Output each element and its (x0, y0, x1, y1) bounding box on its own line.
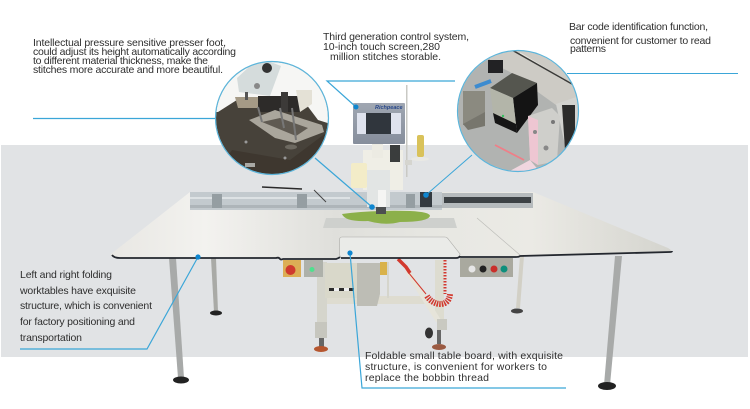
leader line: control system (327, 81, 455, 110)
text: control system: million stitches storable. (330, 51, 441, 63)
leader line: small table board (347, 250, 566, 388)
callout circle: presser foot photo (215, 60, 331, 178)
text: control system: Third generation control system, (323, 31, 469, 43)
text: small table board: Foldable small table board, with exquisite (365, 350, 563, 362)
leader line: bar code (423, 74, 738, 198)
sewing head (351, 85, 429, 214)
text: bar code (569, 21, 711, 55)
text: presser foot: to different material thickness, make the (33, 55, 208, 67)
text: small table board: structure, is convenient for workers to (365, 361, 547, 373)
leader line: folding worktables (20, 254, 201, 349)
text: folding worktables: for factory positioning and (20, 316, 135, 328)
callout circle: bar code reader photo (457, 50, 579, 173)
rail and gantry (190, 187, 533, 210)
text: presser foot: stitches more accurate and more beautiful. (33, 64, 223, 76)
red air hose (398, 259, 450, 304)
text: bar code: patterns (570, 43, 606, 55)
leader line: presser foot (33, 118, 375, 210)
text: presser foot: could adjust its height automatically according (33, 46, 236, 58)
work plate and green embroidery (323, 211, 457, 228)
background band (1, 145, 748, 357)
text: folding worktables: transportation (20, 332, 82, 344)
worktable (111, 192, 672, 260)
power indicator box (304, 260, 323, 277)
text: bar code: convenient for customer to read (570, 35, 711, 47)
text: small table board: replace the bobbin thread (365, 372, 489, 384)
text: bar code: Bar code identification function, (569, 21, 708, 33)
text: folding worktables (19, 269, 152, 344)
text: presser foot (33, 37, 236, 76)
text: folding worktables: worktables have exquisite (19, 285, 136, 297)
text: presser foot: Intellectual pressure sensitive presser foot, (33, 37, 226, 49)
text: folding worktables: Left and right folding (20, 269, 112, 281)
emergency stop box (283, 260, 301, 277)
text: control system (323, 31, 469, 63)
text: control system: 10-inch touch screen,280 (323, 41, 440, 53)
control touch screen (353, 103, 405, 144)
machine base cabinet (314, 260, 447, 352)
text: small table board (365, 350, 563, 384)
control touch screen: Richpeace (375, 105, 403, 111)
button panel (460, 258, 513, 277)
table legs and feet (169, 256, 622, 390)
foldable small table board (340, 237, 460, 258)
text: folding worktables: structure, which is convenient (20, 300, 152, 312)
